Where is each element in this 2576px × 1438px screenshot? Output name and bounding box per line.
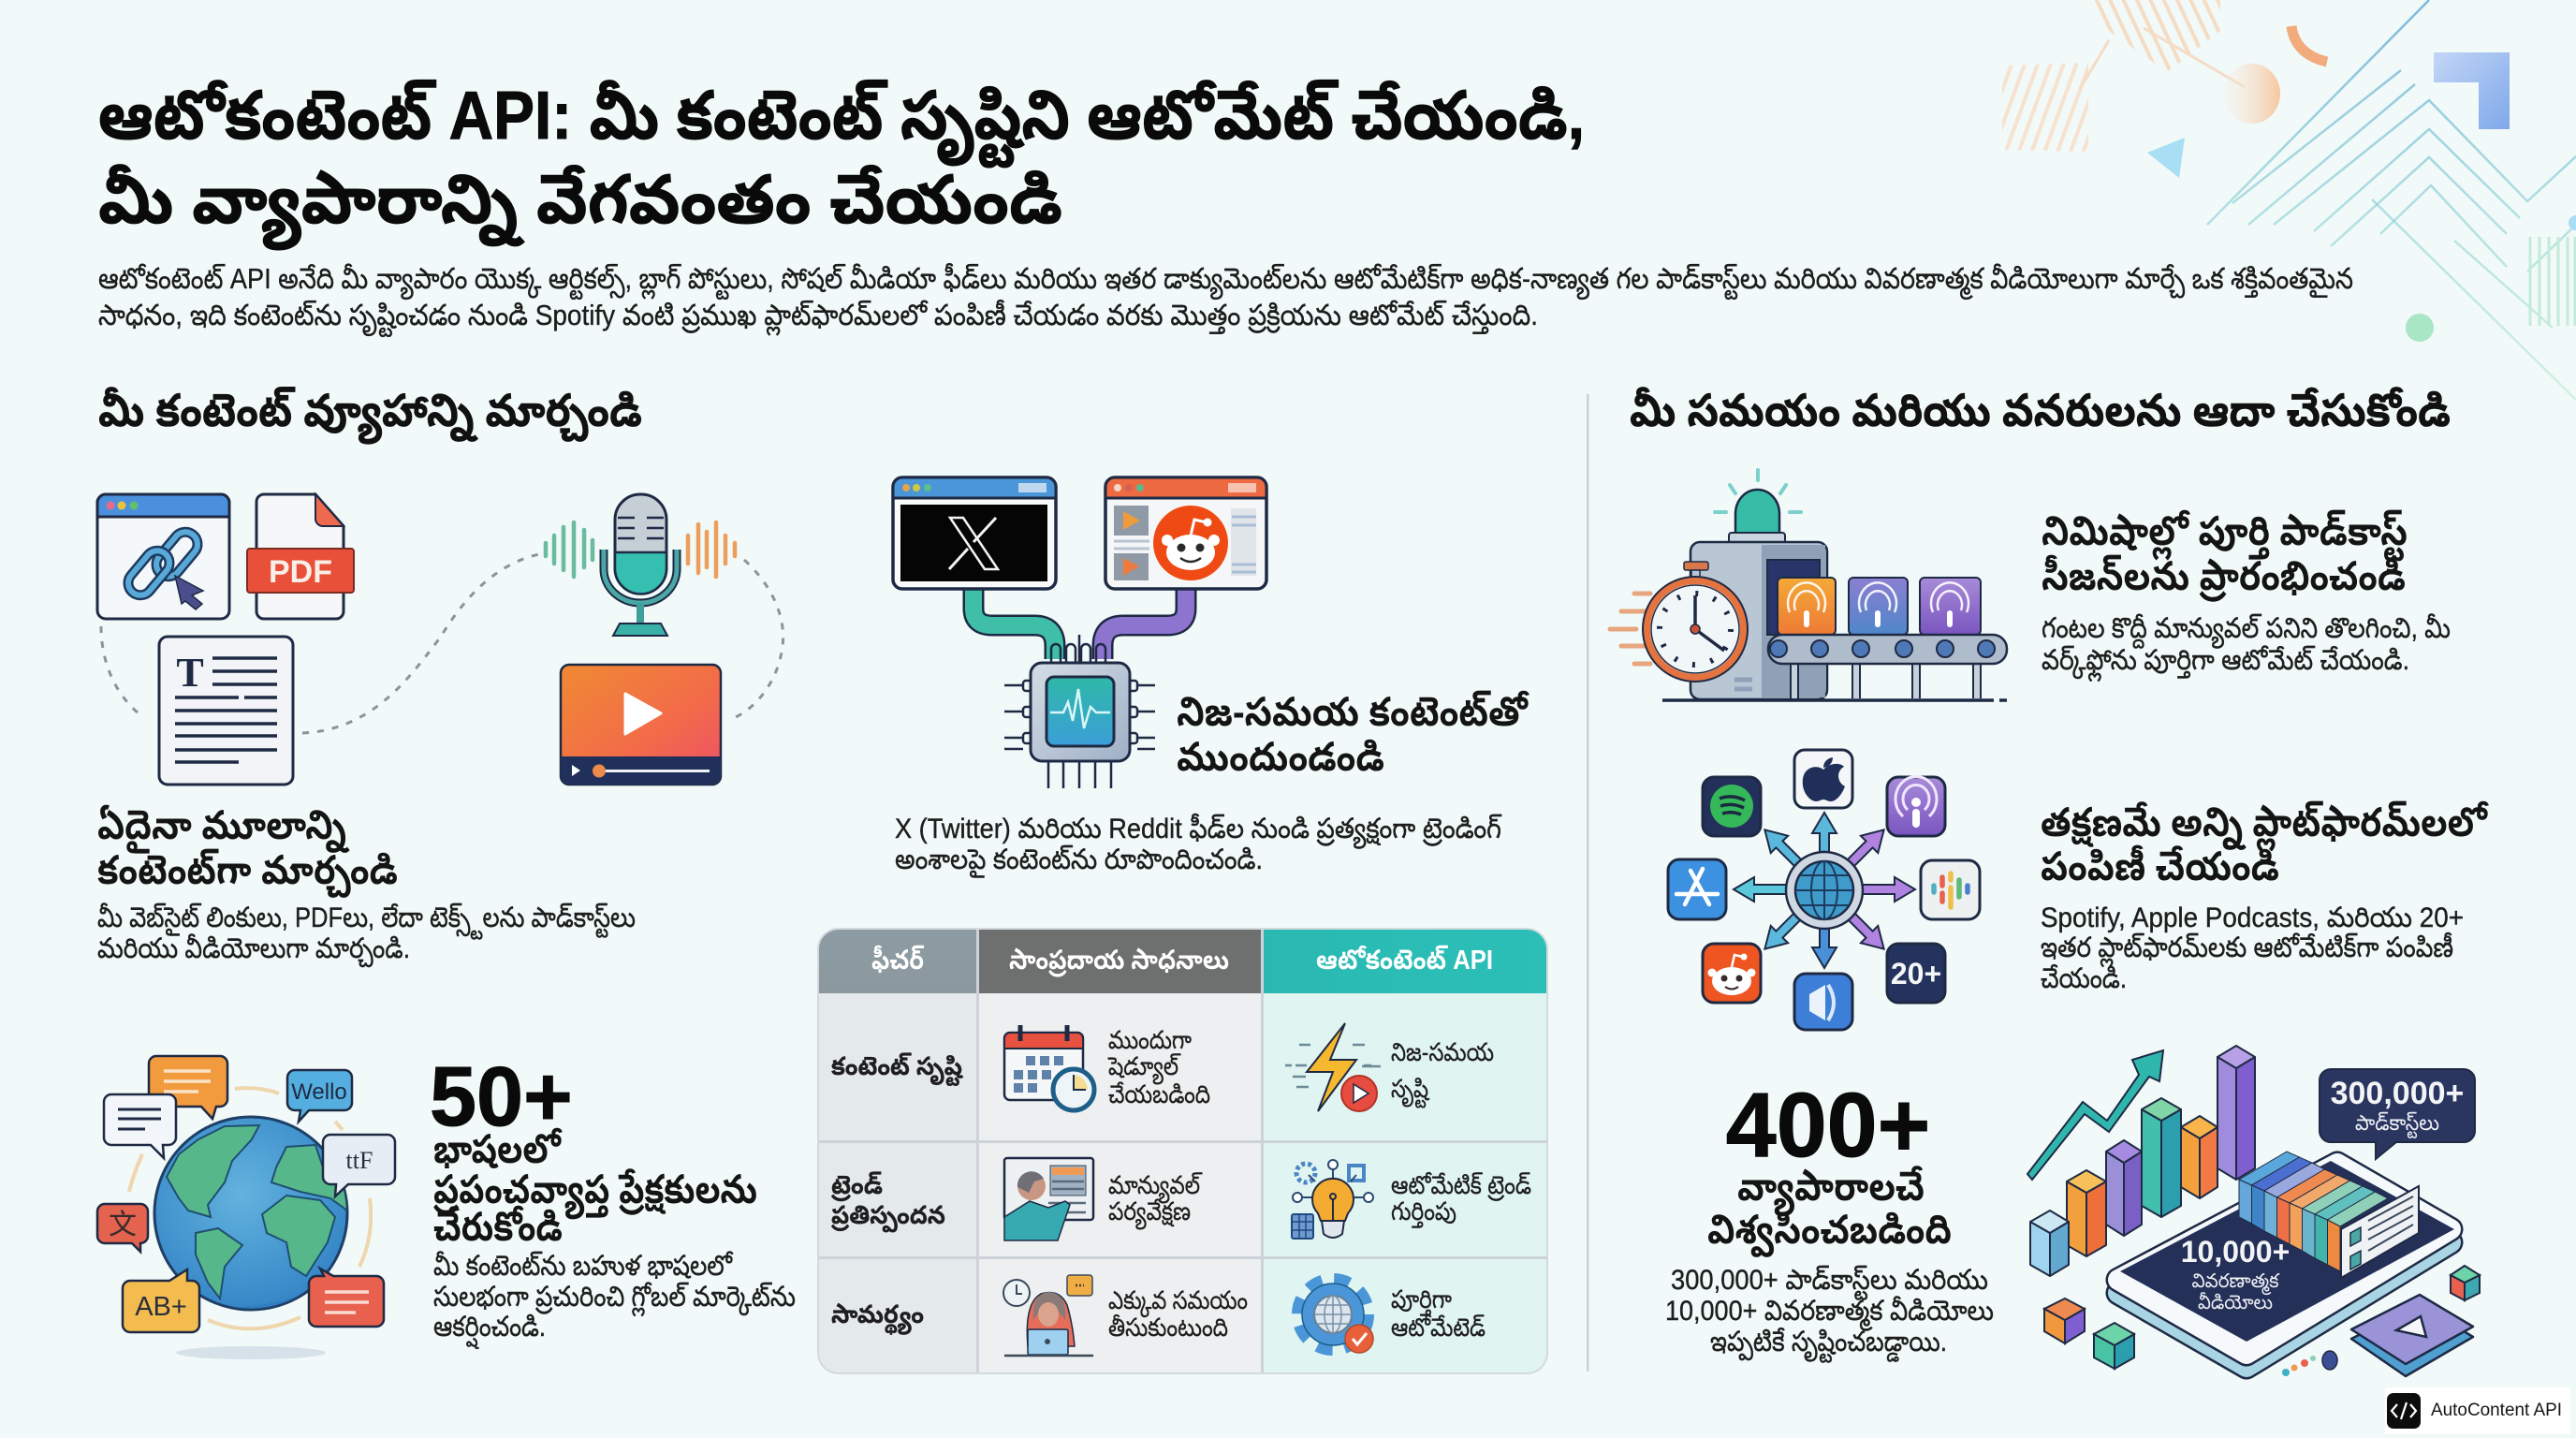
icon: PDF file: PDF xyxy=(269,554,332,590)
table header: ఆటోకంటెంట్ API xyxy=(1316,945,1493,976)
icon: audio waves xyxy=(546,522,735,577)
comparison table xyxy=(818,929,1547,1373)
description: వర్క్‌ఫ్లోను పూర్తిగా ఆటోమేట్ చేయండి. xyxy=(2042,645,2409,682)
intro paragraph xyxy=(98,262,2353,337)
stat on phone: వివరణాత్మక xyxy=(2192,1270,2279,1296)
icon: calendar clock xyxy=(1004,1025,1094,1110)
heading: పంపిణీ చేయండి xyxy=(2041,844,2279,889)
text: takes more time: తీసుకుంటుంది xyxy=(1108,1313,1228,1342)
heading xyxy=(1707,1165,1952,1257)
description: ఆకర్షించండి. xyxy=(433,1312,546,1349)
table header xyxy=(871,945,1493,977)
text: traditional xyxy=(1107,1026,1210,1108)
description: ఇప్పటికే సృష్టించబడ్డాయి. xyxy=(1710,1327,1947,1363)
description: మీ కంటెంట్‌ను బహుళ భాషలలో xyxy=(433,1251,734,1282)
icon: code brackets xyxy=(2387,1393,2421,1429)
row: trend response: ప్రతిస్పందన xyxy=(831,1201,945,1233)
description xyxy=(895,813,1501,878)
icon: PDF file xyxy=(247,494,354,619)
panel: any source to content xyxy=(97,494,783,968)
text: fully automated: ఆటోమేటెడ్ xyxy=(1391,1313,1486,1342)
icon: distribution hub xyxy=(1668,750,1980,1030)
text: autocontent: సృష్టి xyxy=(1391,1075,1429,1108)
icon: Reddit window xyxy=(1105,477,1266,589)
description xyxy=(433,1251,796,1349)
icon: globe with speech bubbles: Wello xyxy=(291,1079,347,1105)
data pipes xyxy=(973,590,1186,659)
icon: globe with speech bubbles: ttF xyxy=(346,1147,373,1174)
icon: browser link xyxy=(97,494,229,619)
brand name: AutoContent API xyxy=(2431,1400,2562,1420)
title: ఆటోకంటెంట్ API: మీ కంటెంట్ సృష్టిని ఆటోమేట్ చేయండి, xyxy=(98,79,1585,169)
description: మీ వెబ్‌సైట్ లింకులు, PDFలు, లేదా టెక్స్ట్‌లను పాడ్‌కాస్ట్‌లు xyxy=(97,902,636,940)
text: autocontent: నిజ-సమయ xyxy=(1391,1038,1494,1066)
icon: text document xyxy=(159,637,293,785)
description: మరియు వీడియోలుగా మార్చండి. xyxy=(97,933,410,968)
description xyxy=(2042,613,2451,682)
panel: trusted by 400+ xyxy=(1665,1046,2480,1376)
heading: నిజ-సమయ కంటెంట్‌తో xyxy=(1177,690,1530,735)
callout: 300,000+ podcasts: పాడ్‌కాస్ట్‌లు xyxy=(2355,1110,2439,1138)
stat on phone xyxy=(2181,1235,2290,1313)
icon: globe with speech bubbles: AB+ xyxy=(135,1292,187,1322)
icon: man at screen xyxy=(1004,1158,1093,1240)
text: traditional: చేయబడింది xyxy=(1108,1080,1210,1108)
icon: X window xyxy=(893,477,1056,589)
description: చేయండి. xyxy=(2041,963,2127,994)
description: X (Twitter) మరియు Reddit ఫీడ్‌ల నుండి ప్రత్యక్షంగా ట్రెండింగ్ xyxy=(895,813,1501,849)
callout: 300,000+ podcasts xyxy=(2320,1069,2475,1159)
description: అంశాలపై కంటెంట్‌ను రూపొందించండి. xyxy=(895,844,1263,878)
small dots xyxy=(2282,1351,2337,1376)
title xyxy=(98,79,1585,251)
heading: తక్షణమే అన్ని ప్లాట్‌ఫారమ్‌లలో xyxy=(2041,800,2489,852)
row: content creation: కంటెంట్ సృష్టి xyxy=(831,1052,964,1086)
text: traditional: ముందుగా xyxy=(1108,1026,1192,1054)
stat on phone: వీడియోలు xyxy=(2198,1292,2273,1313)
icon: stressed worker xyxy=(1003,1275,1093,1356)
description: గంటల కొద్దీ మాన్యువల్ పనిని తొలగించి, మీ xyxy=(2042,613,2451,649)
heading xyxy=(432,1127,757,1250)
icon: globe with speech bubbles: 文 xyxy=(109,1201,137,1242)
heading: సీజన్‌లను ప్రారంభించండి xyxy=(2042,554,2406,602)
description xyxy=(97,902,636,968)
panel: 50+ languages xyxy=(97,1050,796,1359)
icon: conveyor machine with stopwatch xyxy=(1610,470,2007,700)
description: 10,000+ వివరణాత్మక వీడియోలు xyxy=(1665,1296,1994,1331)
row: trend response xyxy=(831,1158,1531,1240)
text: traditional: షెడ్యూల్ xyxy=(1107,1052,1180,1085)
panel: real-time content xyxy=(893,477,1530,878)
text: manual monitoring: మాన్యువల్ xyxy=(1108,1171,1202,1204)
heading xyxy=(2041,800,2489,889)
icon: video player xyxy=(561,665,721,785)
icon: lightning play xyxy=(1285,1023,1381,1111)
panel: distribute to all platforms xyxy=(1668,750,2489,1030)
heading: చేరుకోండి xyxy=(433,1205,563,1250)
text: automatic trend detection: గుర్తింపు xyxy=(1391,1197,1456,1228)
table cells xyxy=(818,929,1547,1373)
description xyxy=(2041,902,2464,994)
decorative geometric corner xyxy=(2002,0,2576,400)
trend arrow xyxy=(2027,1050,2163,1180)
description: 300,000+ పాడ్‌కాస్ట్‌లు మరియు xyxy=(1671,1265,1988,1300)
heading: ముందుండండి xyxy=(1177,735,1384,780)
heading: ఏదైనా మూలాన్ని xyxy=(97,803,350,854)
icon: microphone xyxy=(604,494,677,636)
floating cubes xyxy=(2044,1266,2480,1369)
icon: gear globe xyxy=(1297,1279,1373,1353)
icon: idea bulb xyxy=(1292,1160,1373,1239)
dashed flow connectors xyxy=(101,553,783,733)
icon: globe with speech bubbles xyxy=(97,1056,395,1359)
growth bars xyxy=(2030,1046,2255,1276)
title: మీ వ్యాపారాన్ని వేగవంతం చేయండి xyxy=(98,163,1062,251)
description xyxy=(1665,1265,1994,1363)
text: fully automated: పూర్తిగా xyxy=(1391,1285,1452,1316)
text: manual monitoring xyxy=(1108,1171,1202,1230)
intro paragraph: సాధనం, ఇది కంటెంట్‌ను సృష్టించడం నుండి Spotify వంటి ప్రముఖ ప్లాట్‌ఫారమ్‌లలో పంపిణీ చేయడం వరకు మొత్తం ప్రక్రియను ఆటోమేట్ చేస్తుంది. xyxy=(98,299,1538,337)
heading xyxy=(97,803,398,898)
table header: సాంప్రదాయ సాధనాలు xyxy=(1009,946,1229,977)
heading: నిమిషాల్లో పూర్తి పాడ్‌కాస్ట్ xyxy=(2042,509,2408,562)
section heading: transform strategy: మీ కంటెంట్ వ్యూహాన్ని మార్చండి xyxy=(98,387,642,445)
heading xyxy=(1177,690,1530,780)
vertical divider xyxy=(1587,394,1589,1372)
text: automatic trend detection: ఆటోమేటిక్ ట్రెండ్ xyxy=(1391,1171,1531,1201)
row: efficiency xyxy=(831,1275,1486,1356)
text: autocontent xyxy=(1391,1038,1494,1108)
text: fully automated xyxy=(1391,1285,1486,1342)
section heading: save time: మీ సమయం మరియు వనరులను ఆదా చేసుకోండి xyxy=(1630,387,2451,436)
text: automatic trend detection xyxy=(1391,1171,1531,1228)
text: takes more time xyxy=(1108,1286,1248,1342)
row: efficiency: సామర్థ్యం xyxy=(831,1300,924,1335)
stat: 50+: 50+ xyxy=(430,1050,573,1144)
text: takes more time: ఎక్కువ సమయం xyxy=(1108,1286,1248,1318)
play tile xyxy=(2351,1295,2473,1376)
heading xyxy=(2042,509,2408,602)
heading: ప్రపంచవ్యాప్త ప్రేక్షకులను xyxy=(432,1167,757,1220)
icon: distribution hub: 20+ xyxy=(1891,957,1941,990)
stat on phone: 10,000+ xyxy=(2181,1235,2290,1269)
row: content creation xyxy=(831,1023,1494,1111)
callout: 300,000+ podcasts: 300,000+ xyxy=(2331,1076,2464,1111)
heading: కంటెంట్‌గా మార్చండి xyxy=(97,848,398,898)
icon: text document: T xyxy=(176,650,204,696)
row: trend response: ట్రెండ్ xyxy=(831,1171,883,1202)
stack of videos xyxy=(2239,1152,2388,1271)
logo badge xyxy=(2385,1387,2570,1434)
description: సులభంగా ప్రచురించి గ్లోబల్ మార్కెట్‌ను xyxy=(433,1282,796,1317)
stat: 400+: 400+ xyxy=(1726,1074,1930,1176)
heading: వ్యాపారాలచే xyxy=(1737,1165,1925,1217)
table header: ఫీచర్ xyxy=(871,945,925,976)
heading: విశ్వసించబడింది xyxy=(1707,1208,1952,1257)
icon: processor chip xyxy=(1004,635,1155,788)
heading: భాషలలో xyxy=(433,1127,563,1172)
description: Spotify, Apple Podcasts, మరియు 20+ xyxy=(2041,902,2464,933)
panel: launch full seasons xyxy=(1610,470,2451,700)
document card xyxy=(2341,1186,2419,1278)
description: ఇతర ప్లాట్‌ఫారమ్‌లకు ఆటోమేటిక్‌గా పంపిణీ xyxy=(2041,932,2453,968)
phone xyxy=(2118,1161,2454,1367)
text: manual monitoring: పర్యవేక్షణ xyxy=(1108,1197,1191,1230)
chart: isometric growth bars and phone xyxy=(2027,1046,2480,1376)
